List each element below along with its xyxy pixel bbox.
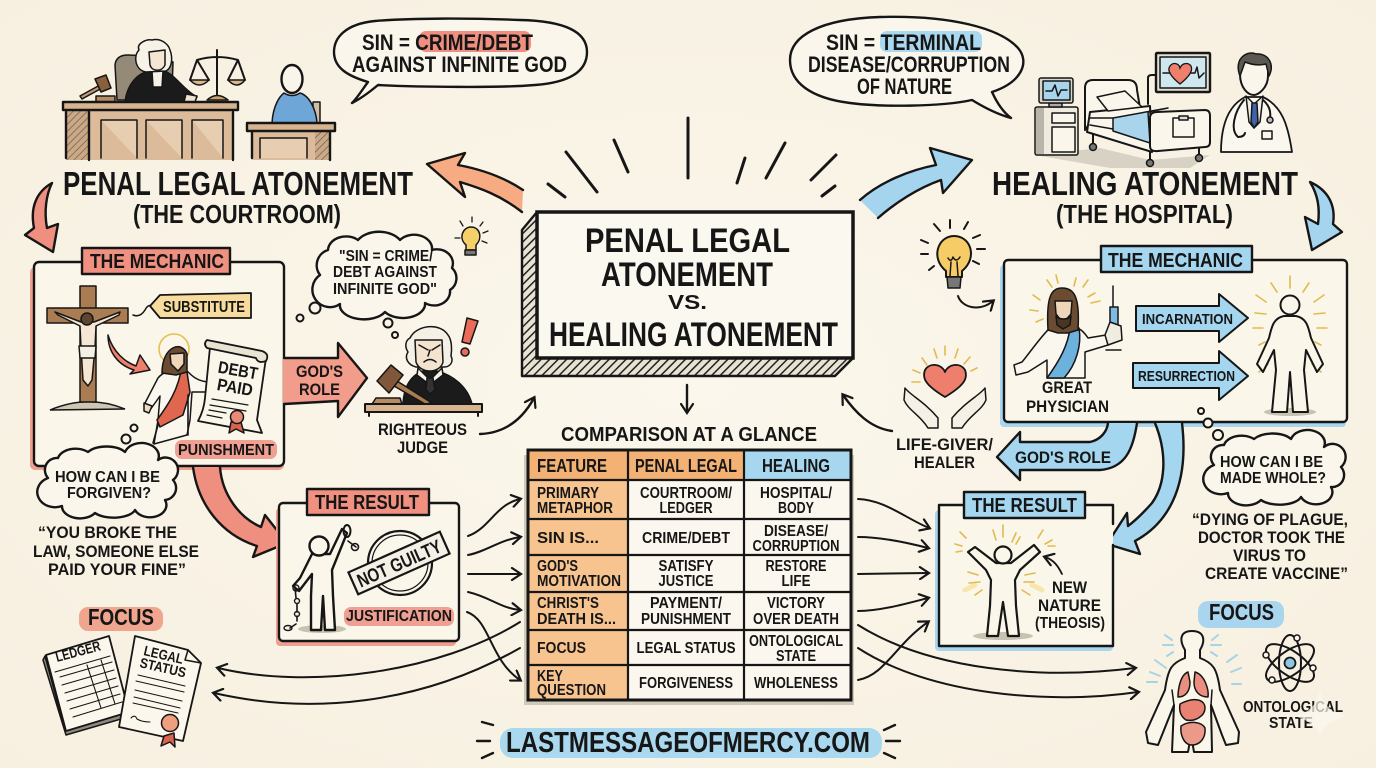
label: the mechanic: THE MECHANIC [90, 251, 224, 273]
header row: FEATURE [537, 456, 607, 476]
row: primary metaphor: HOSPITAL/ [760, 485, 832, 502]
icon: heart in hands [904, 346, 986, 428]
arrow: to new nature [1045, 557, 1062, 574]
row: god's motivation [537, 558, 827, 590]
central title box [522, 212, 853, 376]
header row: HEALING [762, 456, 830, 476]
central title box: VS. [668, 292, 707, 314]
arrows: left result to table [467, 499, 520, 680]
speech bubble: sin = terminal disease: SIN = TERMINAL [826, 30, 981, 55]
doctor [1221, 53, 1292, 152]
scroll: debt paid: PAID [216, 375, 254, 400]
scales of justice [190, 50, 245, 100]
row: sin is: CORRUPTION [752, 538, 840, 555]
row: sin is: DISEASE/ [764, 523, 828, 540]
scroll: debt paid [198, 340, 267, 433]
thought bubble: sin = crime, judge: INFINITE GOD" [333, 281, 437, 298]
figure: new nature person [955, 525, 1055, 640]
judge's chair [115, 55, 173, 100]
thought bubble: sin = crime, judge [296, 232, 456, 338]
row: god's motivation: JUSTICE [658, 573, 714, 590]
thought bubble: how can i be forgiven [37, 424, 178, 518]
central title box: HEALING ATONEMENT [549, 316, 838, 354]
icon: ledger book [43, 636, 129, 735]
icon: big lightbulb [921, 220, 985, 288]
row: primary metaphor: BODY [778, 500, 814, 517]
arrow: mechanic to result, left [193, 467, 287, 557]
thought bubble: how can i be forgiven: FORGIVEN? [67, 485, 151, 502]
thought bubble: sin = crime, judge: DEBT AGAINST [333, 264, 437, 281]
central title box: ATONEMENT [601, 256, 773, 294]
heading: penal legal atonement: (THE COURTROOM) [133, 199, 341, 229]
icon: exclamation [461, 318, 478, 356]
quote: dying of plague: VIRUS TO [1233, 546, 1306, 565]
speech bubble: sin = crime/debt: SIN = CRIME/DEBT [362, 30, 533, 55]
label: the result: THE RESULT [972, 495, 1077, 517]
row: focus: STATE [776, 648, 816, 665]
arrow: god's role, left: GOD'S [296, 362, 343, 381]
quote: dying of plague: “DYING OF PLAGUE, [1192, 510, 1348, 529]
row: god's motivation: GOD'S [537, 558, 578, 575]
judge [125, 40, 197, 102]
bedside cabinet and monitor [1035, 78, 1078, 155]
thought bubble: sin = crime, judge: "SIN = CRIME/ [339, 248, 433, 265]
label: the result: THE RESULT [315, 492, 419, 514]
label: ontological state: STATE [1269, 715, 1313, 732]
row: christ's death: DEATH IS... [537, 611, 616, 628]
row: god's motivation: LIFE [782, 573, 811, 590]
heart monitor [1156, 53, 1210, 92]
label: new nature (theosis) [1035, 578, 1105, 632]
label: punishment: PUNISHMENT [178, 442, 274, 459]
row: key question: WHOLENESS [754, 675, 838, 692]
watermark sparkle [1294, 690, 1346, 736]
icon: crucifix [47, 286, 128, 410]
row: christ's death: PUNISHMENT [641, 611, 731, 628]
heading: penal legal atonement [63, 165, 413, 229]
heading: healing atonement: HEALING ATONEMENT [992, 165, 1298, 202]
quote: dying of plague: CREATE VACCINE” [1205, 564, 1348, 583]
row: primary metaphor: LEDGER [660, 500, 713, 517]
figure: jesus the great physician [1014, 275, 1122, 378]
row: primary metaphor: METAPHOR [537, 500, 613, 517]
icon: small lightbulb [455, 217, 488, 255]
arrow: centre to table [686, 385, 688, 412]
label: the mechanic: THE MECHANIC [1108, 250, 1243, 272]
arrow: god's role, left [283, 343, 367, 417]
arrow: bulb to right mechanic [958, 296, 993, 307]
speech bubble: sin = terminal disease: DISEASE/CORRUPTION [808, 52, 1010, 77]
row: christ's death: OVER DEATH [753, 611, 839, 628]
icon: legal status document [119, 636, 201, 747]
rays above central box [548, 118, 836, 197]
label: focus, right: FOCUS [1209, 599, 1274, 625]
arrow: incarnation: INCARNATION [1142, 311, 1233, 328]
arrow: cross to christ [108, 335, 150, 374]
thought bubble: how can i be made whole [1198, 408, 1346, 505]
arrow: centre to penal legal [427, 153, 523, 212]
arrow: heading to right mechanic [1305, 182, 1342, 250]
row: sin is: SIN IS... [537, 530, 599, 547]
row: focus: ONTOLOGICAL [749, 633, 843, 650]
row: focus: FOCUS [537, 640, 586, 657]
arrow: god's role, right: GOD'S ROLE [1015, 448, 1111, 467]
label: new nature (theosis): NEW [1052, 578, 1088, 597]
icon: atom [1260, 635, 1320, 691]
figure: healed person [1253, 276, 1327, 416]
quote: you broke the law: “YOU BROKE THE [38, 523, 177, 542]
stamp: not guilty: NOT GUILTY [354, 536, 445, 592]
header row: PENAL LEGAL [635, 456, 737, 476]
row: key question: FORGIVENESS [639, 675, 733, 692]
quote: you broke the law: PAID YOUR FINE” [48, 560, 186, 579]
row: god's motivation: MOTIVATION [537, 573, 621, 590]
row: primary metaphor [537, 485, 832, 517]
arrow: healer to centre [843, 395, 892, 431]
figure: righteous judge [365, 327, 482, 416]
label: life-giver healer: LIFE-GIVER/ [896, 435, 993, 454]
row: key question: KEY [537, 668, 563, 685]
arrow: centre to healing [860, 148, 972, 218]
panel: left mechanic [30, 248, 284, 470]
arrow: mechanic to result, right [1107, 423, 1184, 554]
speech bubble: sin = terminal disease: OF NATURE [857, 74, 952, 99]
label: new nature (theosis): NATURE [1038, 596, 1101, 615]
label: life-giver healer [896, 435, 993, 472]
judge's bench [63, 102, 238, 160]
figure: jesus with sash [144, 334, 208, 444]
gavel [80, 75, 115, 102]
table heading: COMPARISON AT A GLANCE [561, 424, 817, 446]
heading: healing atonement: (THE HOSPITAL) [1056, 199, 1233, 229]
label: righteous judge: RIGHTEOUS [378, 420, 467, 439]
row: key question [537, 668, 838, 699]
website footer: LASTMESSAGEOFMERCY.COM [506, 727, 870, 759]
row: christ's death: PAYMENT/ [650, 595, 722, 612]
arrows: table to right result [858, 499, 929, 680]
row: god's motivation: RESTORE [766, 558, 827, 575]
arrows: table to right focus [858, 625, 1138, 697]
label: great physician: PHYSICIAN [1026, 397, 1109, 416]
panel: right mechanic [1000, 246, 1347, 427]
floor shadow [1035, 148, 1210, 168]
label: righteous judge: JUDGE [397, 438, 448, 457]
central title box: PENAL LEGAL [585, 222, 790, 260]
arrows: table to left focus [214, 622, 520, 704]
quote: dying of plague: DOCTOR TOOK THE [1198, 528, 1345, 547]
quote: dying of plague [1192, 510, 1348, 583]
panel: left result [276, 489, 459, 646]
illustration: courtroom [63, 40, 335, 160]
illustration: hospital [1035, 53, 1292, 168]
label: new nature (theosis): (THEOSIS) [1035, 615, 1105, 632]
quote: you broke the law [33, 523, 199, 579]
arrow: god's role, right [997, 423, 1137, 480]
arrow: judge to centre [480, 398, 534, 434]
icon: body with organs [1146, 631, 1241, 752]
row: sin is [537, 523, 840, 555]
speech bubble: sin = crime/debt [334, 19, 587, 103]
row: christ's death: CHRIST'S [537, 595, 599, 612]
label: life-giver healer: HEALER [914, 453, 975, 472]
tag: substitute: SUBSTITUTE [163, 299, 245, 316]
speech bubble: sin = crime/debt: AGAINST INFINITE GOD [352, 52, 567, 77]
icon: legal status document: LEGAL [142, 642, 185, 667]
thought bubble: how can i be made whole: HOW CAN I BE [1220, 454, 1323, 471]
thought bubble: how can i be forgiven: HOW CAN I BE [55, 469, 160, 486]
hospital bed [1085, 75, 1210, 166]
heading: healing atonement [992, 165, 1298, 229]
icon: legal status document: STATUS [138, 654, 188, 680]
figure: freed person with broken chains [284, 525, 358, 633]
heading: penal legal atonement: PENAL LEGAL ATONEMENT [63, 165, 413, 202]
label: focus, left: FOCUS [88, 604, 154, 630]
row: primary metaphor: PRIMARY [537, 485, 599, 502]
label: great physician: GREAT [1042, 378, 1093, 397]
header row [537, 456, 830, 476]
row: christ's death [537, 595, 839, 628]
label: justification: JUSTIFICATION [346, 608, 452, 625]
speech bubble: sin = terminal disease [790, 17, 1023, 118]
row: focus [537, 633, 843, 665]
label: ontological state: ONTOLOGICAL [1243, 699, 1343, 716]
quote: you broke the law: LAW, SOMEONE ELSE [33, 542, 199, 561]
row: key question: QUESTION [537, 682, 606, 699]
panel: right result [935, 492, 1113, 651]
label: great physician [1026, 378, 1109, 416]
label: ontological state [1243, 699, 1343, 732]
scroll: debt paid: DEBT [217, 358, 260, 384]
arrow: heading to left mechanic [25, 183, 58, 252]
defendant [247, 65, 335, 160]
row: christ's death: VICTORY [767, 595, 825, 612]
label: righteous judge [378, 420, 467, 457]
arrow: resurrection: RESURRECTION [1138, 368, 1235, 385]
row: focus: LEGAL STATUS [636, 640, 736, 657]
tag: substitute [133, 293, 251, 318]
arrow: god's role, left: ROLE [299, 380, 340, 399]
row: sin is: CRIME/DEBT [642, 530, 730, 547]
comparison table [524, 450, 854, 705]
row: primary metaphor: COURTROOM/ [640, 485, 732, 502]
arrow: resurrection [1133, 351, 1248, 400]
row: god's motivation: SATISFY [658, 558, 714, 575]
icon: ledger book: LEDGER [54, 638, 102, 665]
thought bubble: how can i be made whole: MADE WHOLE? [1220, 470, 1326, 487]
arrow: incarnation [1136, 294, 1248, 342]
